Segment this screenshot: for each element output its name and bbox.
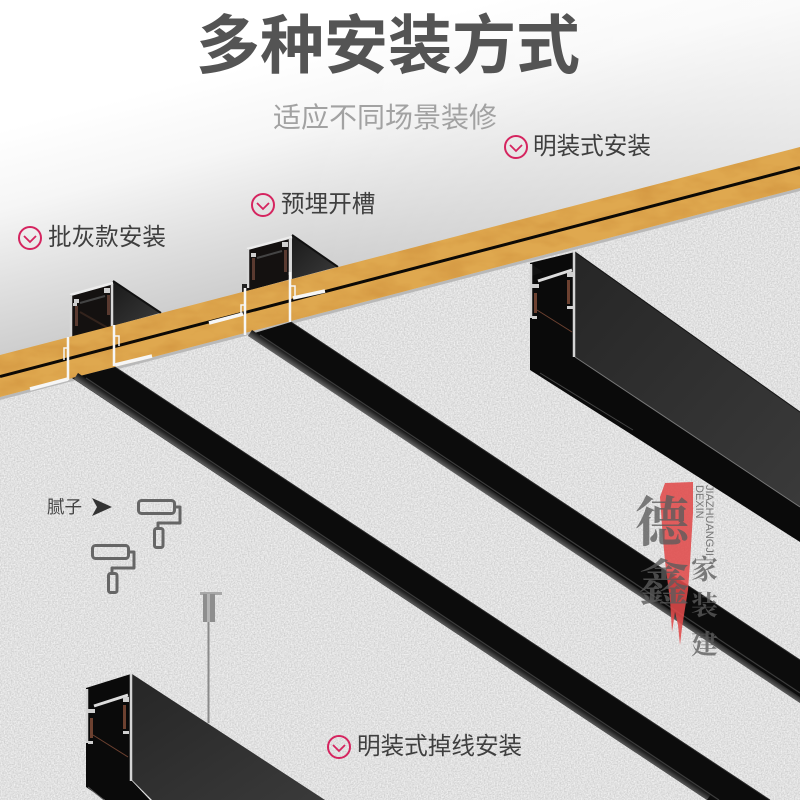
brand watermark: 家 xyxy=(691,548,718,587)
track 2 head above the ceiling band xyxy=(242,235,338,292)
surface-mounted track xyxy=(530,252,800,542)
subtitle: 适应不同场景装修 xyxy=(273,102,497,133)
putty label with arrow xyxy=(47,497,112,517)
brand watermark: 德 xyxy=(635,480,693,557)
putty label with arrow: 腻子 xyxy=(47,497,82,517)
plaster-install slot lines in band xyxy=(30,325,152,389)
icon: paint roller lower xyxy=(92,546,134,592)
brand watermark: DEXIN xyxy=(693,485,705,519)
icon: paint roller upper xyxy=(138,500,180,548)
background gradient above the wall xyxy=(0,0,800,400)
label: pendant wire: 明装式掉线安装 xyxy=(357,733,522,760)
label: embedded groove: 预埋开槽 xyxy=(281,191,375,218)
embedded-groove slot lines in band xyxy=(209,272,325,335)
brand watermark: 建 xyxy=(691,623,718,662)
track 1 head above the ceiling band xyxy=(70,281,161,338)
pendant-wire anchor and wire xyxy=(200,592,222,723)
label: surface mounted: 明装式安装 xyxy=(533,133,651,160)
label: plaster install: 批灰款安装 xyxy=(48,224,166,251)
pendant-wire mounted track xyxy=(86,674,325,800)
brand watermark: 鑫 xyxy=(639,544,689,616)
track 1 long body xyxy=(72,367,770,800)
brand watermark: JIAZHUANGJI xyxy=(703,485,715,556)
track 2 long body xyxy=(248,322,800,703)
title: 多种安装方式 xyxy=(196,10,580,82)
brand watermark: 装 xyxy=(691,584,718,623)
brand watermark xyxy=(635,480,718,662)
ceiling wood band with groove xyxy=(0,140,800,402)
